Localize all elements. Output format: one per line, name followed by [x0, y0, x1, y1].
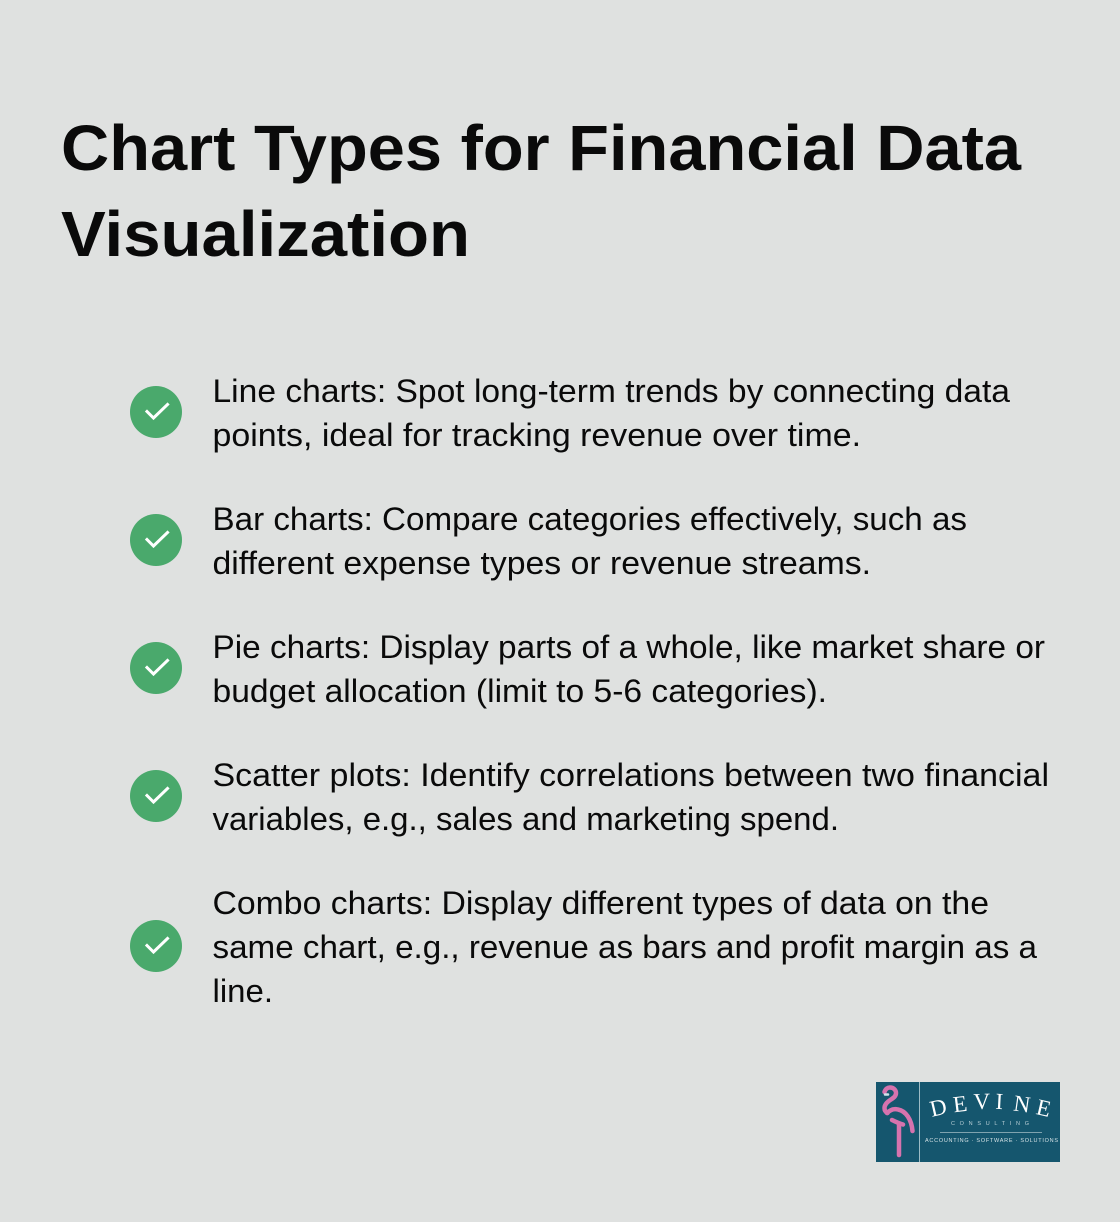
item: pie charts [130, 629, 1045, 709]
text: combo charts: line. [212, 973, 273, 1009]
title [61, 112, 1021, 270]
text: bar charts [212, 501, 967, 581]
icon: check circle [130, 770, 182, 822]
logo wordmark: DEVINE: N [1012, 1091, 1032, 1118]
title: Chart Types for Financial Data [61, 112, 1021, 184]
logo tagline: ACCOUNTING · SOFTWARE · SOLUTIONS [925, 1138, 1058, 1144]
logo wordmark: DEVINE: E [1034, 1094, 1053, 1122]
title: Visualization [61, 198, 470, 270]
icon: check circle [130, 514, 182, 566]
checklist [130, 373, 1049, 1009]
logo wordmark: DEVINE: V [973, 1089, 991, 1114]
logo wordmark: DEVINE: I [995, 1089, 1004, 1114]
text: line charts: Line charts: Spot long-term trends by connecting data [212, 373, 1011, 409]
icon: check circle [130, 386, 182, 438]
logo wordmark: DEVINE: E [952, 1091, 969, 1117]
text: bar charts: Bar charts: Compare categories effectively, such as [212, 501, 967, 537]
text: scatter plots: variables, e.g., sales and marketing spend. [212, 801, 839, 837]
logo wordmark: DEVINE [927, 1089, 1053, 1122]
text: pie charts [212, 629, 1045, 709]
text: combo charts: Combo charts: Display different types of data on the [212, 885, 989, 921]
text: pie charts: budget allocation (limit to 5-6 categories). [212, 673, 827, 709]
logo: Devine Consulting [876, 1082, 1060, 1162]
item: bar charts [130, 501, 967, 581]
text: scatter plots [212, 757, 1049, 837]
item: combo charts [130, 885, 1038, 1009]
icon: flamingo [884, 1088, 912, 1155]
item: scatter plots [130, 757, 1049, 837]
text: line charts [212, 373, 1011, 453]
text: bar charts: different expense types or revenue streams. [212, 545, 871, 581]
item: line charts [130, 373, 1011, 453]
logo wordmark: DEVINE: D [927, 1094, 949, 1122]
icon: check circle [130, 920, 182, 972]
icon: check circle [130, 642, 182, 694]
text: combo charts: same chart, e.g., revenue as bars and profit margin as a [212, 929, 1038, 965]
logo text: consulting: CONSULTING [951, 1121, 1029, 1127]
text: line charts: points, ideal for tracking revenue over time. [212, 417, 861, 453]
text: scatter plots: Scatter plots: Identify correlations between two financial [212, 757, 1049, 793]
text: combo charts [212, 885, 1038, 1009]
text: pie charts: Pie charts: Display parts of a whole, like market share or [212, 629, 1045, 665]
